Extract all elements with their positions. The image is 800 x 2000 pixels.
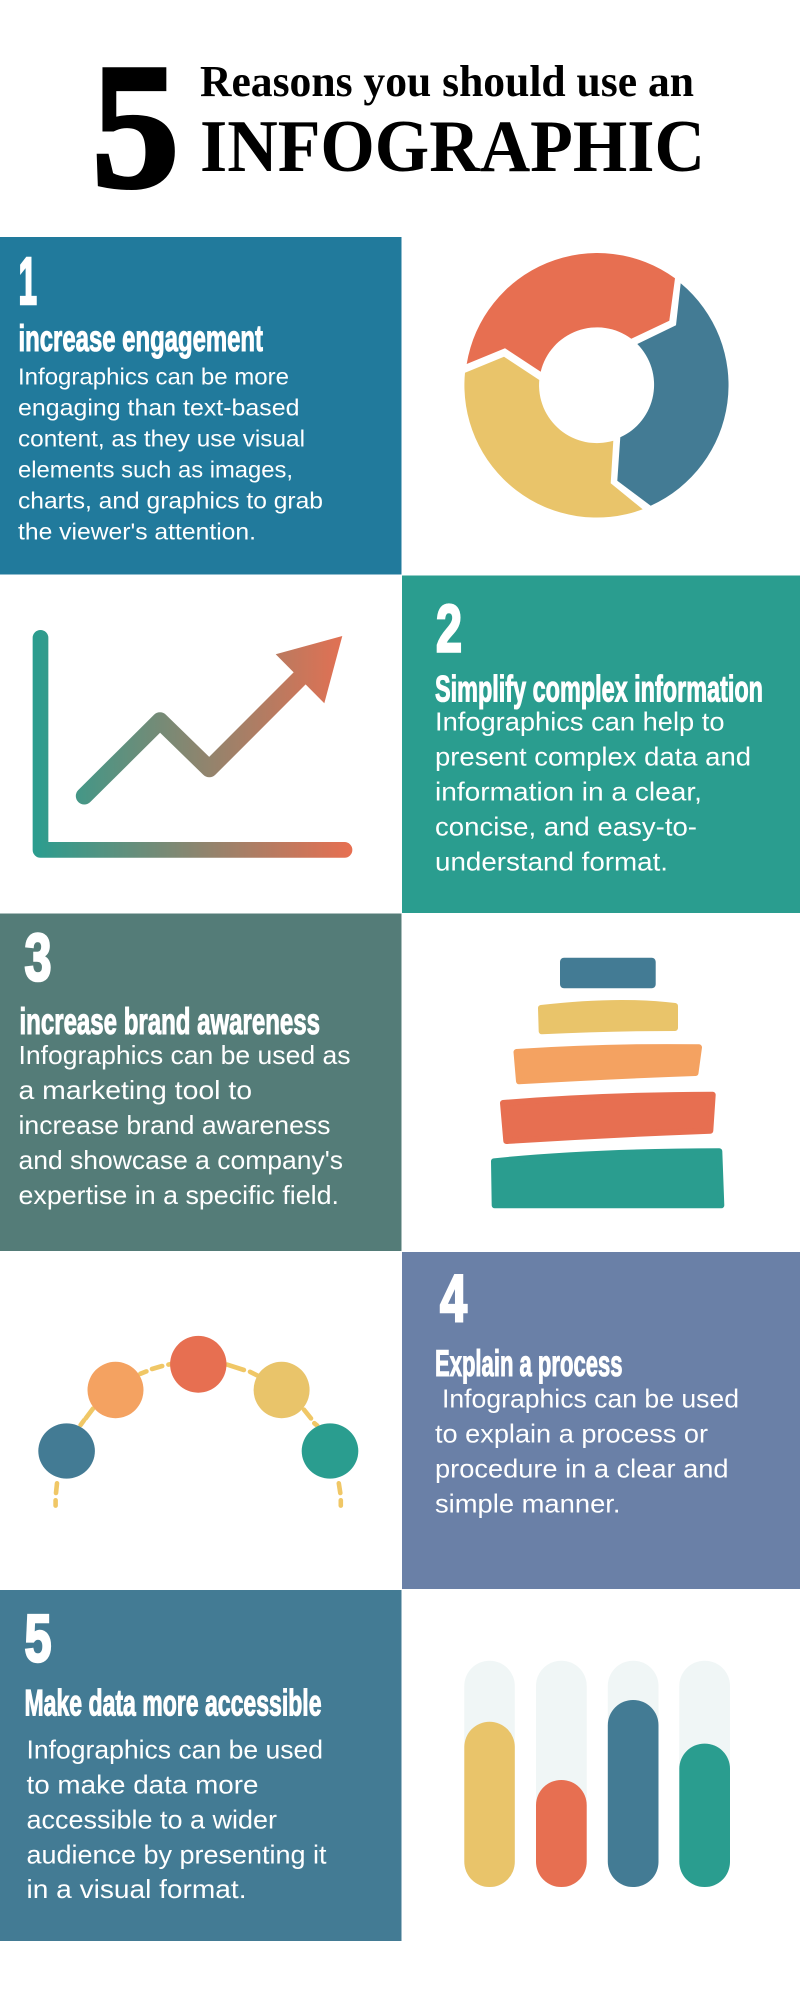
body text 5: in a visual format. <box>26 1874 246 1904</box>
body text 4: simple manner. <box>435 1488 620 1518</box>
dotted arc with five circles <box>38 1336 358 1506</box>
donut segment: blue <box>617 283 729 506</box>
bar: yellow <box>464 1722 515 1887</box>
bar chart <box>464 1661 730 1887</box>
panel 5: make data more accessible <box>0 1590 402 1941</box>
pyramid layer: yellow <box>541 1003 675 1031</box>
body text 3: a marketing tool to <box>18 1075 252 1105</box>
donut cycle chart <box>464 253 729 518</box>
line chart with rising arrow <box>40 636 344 850</box>
body text 2: Infographics can help to <box>435 706 724 736</box>
body text 3: Infographics can be used as <box>18 1040 350 1070</box>
body text 5 <box>26 1734 327 1904</box>
number 2: 2 <box>436 592 462 666</box>
body text 2: present complex data and <box>435 742 751 772</box>
body text 5: audience by presenting it <box>26 1840 327 1870</box>
body text 3 <box>18 1040 350 1210</box>
number 4: 4 <box>440 1262 467 1336</box>
body text 1: the viewer's attention. <box>18 518 256 544</box>
circle: yellow <box>254 1362 310 1418</box>
heading 4: Explain a process <box>435 1343 622 1384</box>
panel 1: increase engagement <box>0 237 402 574</box>
title line 2: INFOGRAPHIC <box>200 106 705 188</box>
zigzag trend line <box>84 672 306 796</box>
chart axes <box>40 638 344 850</box>
arrow head <box>276 636 342 703</box>
number 5: 5 <box>24 1602 52 1676</box>
body text 5: Infographics can be used <box>26 1734 323 1764</box>
body text 3: increase brand awareness <box>18 1110 330 1140</box>
pyramid layer: red <box>503 1095 713 1141</box>
heading 5: Make data more accessible <box>24 1682 322 1724</box>
big numeral 5: 5 <box>92 27 179 225</box>
pyramid layer: blue <box>560 958 656 988</box>
panel 4: explain a process <box>402 1252 800 1589</box>
body text 1: Infographics can be more <box>18 364 289 390</box>
donut segment: yellow <box>464 357 643 518</box>
body text 2 <box>435 706 751 876</box>
body text 3: and showcase a company's <box>18 1145 343 1175</box>
body text 1 <box>18 364 323 544</box>
bar: teal <box>679 1744 730 1887</box>
bar: blue <box>608 1700 658 1887</box>
body text 5: to make data more <box>26 1770 258 1800</box>
title line 1: Reasons you should use an <box>200 57 694 106</box>
number 3: 3 <box>24 920 52 996</box>
pyramid layer: teal <box>494 1151 721 1205</box>
body text 1: charts, and graphics to grab <box>18 488 323 514</box>
dashed arc <box>56 1364 341 1506</box>
stacked pyramid <box>494 958 721 1205</box>
body text 1: content, as they use visual <box>18 426 305 452</box>
bar: red <box>536 1780 587 1887</box>
body text 2: information in a clear, <box>435 776 702 806</box>
body text 2: concise, and easy-to- <box>435 812 697 842</box>
body text 1: elements such as images, <box>18 456 293 482</box>
body text 2: understand format. <box>435 846 668 876</box>
body text 1: engaging than text-based <box>18 394 300 420</box>
body text 4: to explain a process or <box>435 1418 708 1448</box>
title <box>92 27 705 225</box>
donut segment: orange <box>467 253 675 372</box>
circle: orange <box>88 1362 144 1418</box>
body text 4 <box>435 1384 739 1518</box>
panel 3: increase brand awareness <box>0 914 402 1251</box>
heading 1: increase engagement <box>18 318 263 359</box>
pyramid layer: orange <box>516 1047 699 1081</box>
panel 2: simplify complex information <box>402 576 800 913</box>
body text 3: expertise in a specific field. <box>18 1180 339 1210</box>
circle: red <box>170 1336 226 1393</box>
body text 5: accessible to a wider <box>26 1804 277 1834</box>
body text 4: Infographics can be used <box>442 1384 739 1414</box>
circle: blue <box>38 1423 95 1479</box>
body text 4: procedure in a clear and <box>435 1454 728 1484</box>
circle: teal <box>302 1423 358 1479</box>
heading 3: increase brand awareness <box>20 1001 320 1042</box>
bar tracks <box>464 1661 730 1887</box>
panel 1: increase engagement: 1 <box>18 244 37 319</box>
